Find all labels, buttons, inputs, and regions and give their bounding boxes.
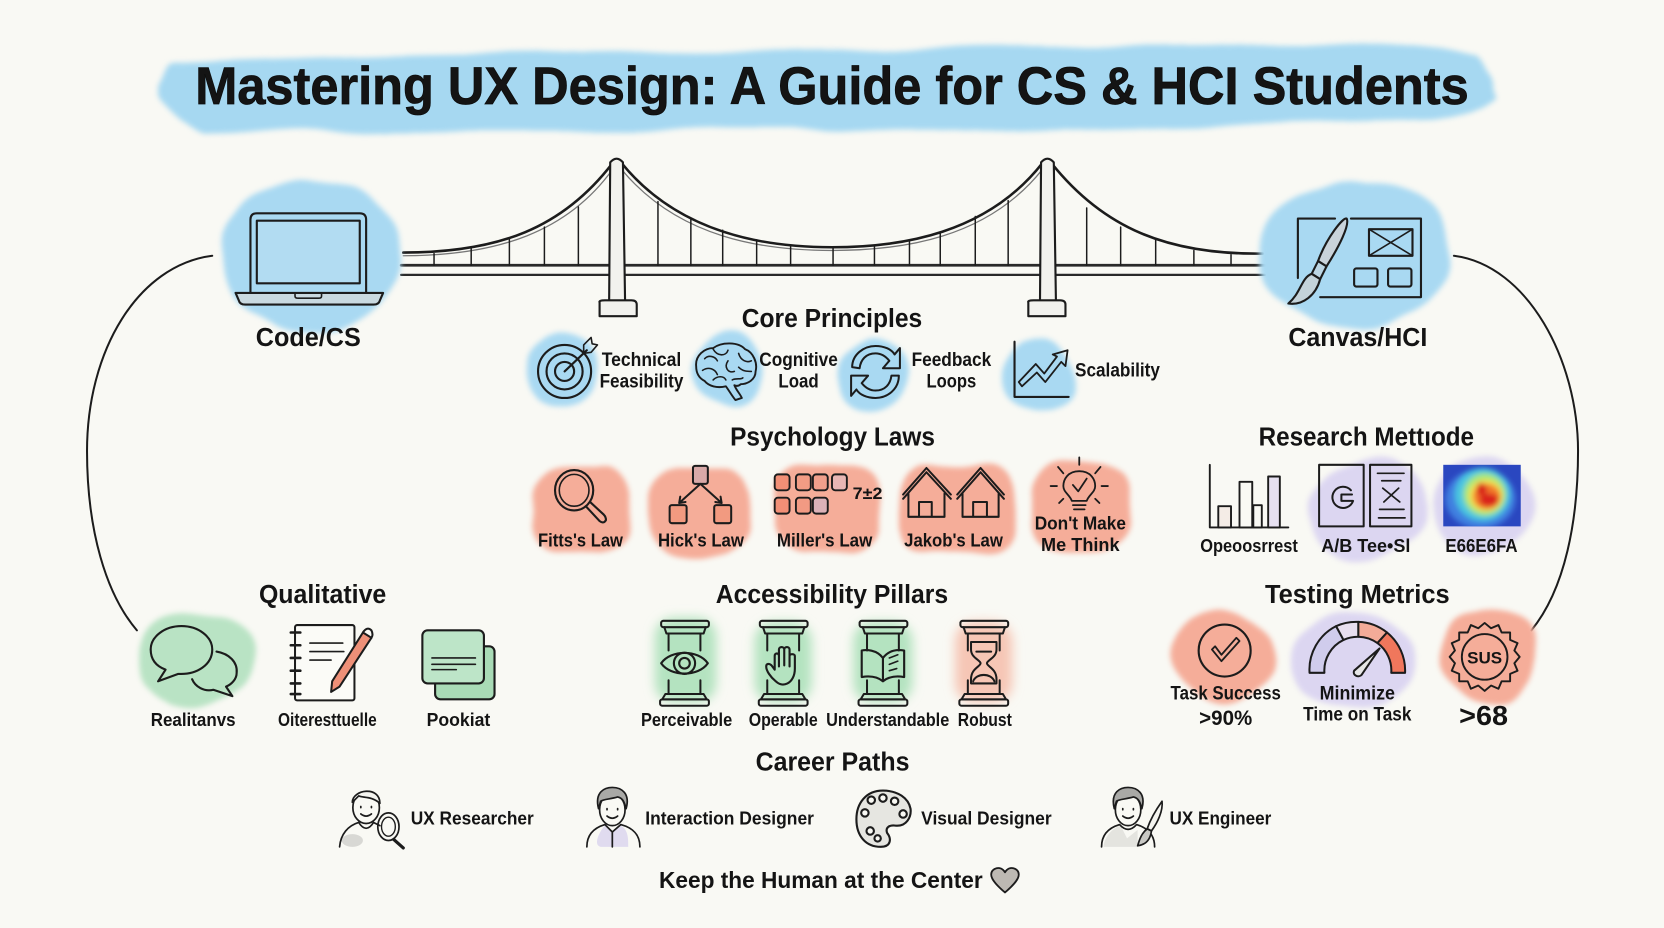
pillar: robust: Robust [958,710,1012,730]
career: visual designer [856,791,1052,847]
metric: task success [1171,609,1281,730]
section: research methods [1200,424,1532,559]
icon: canvas and brush [1288,218,1421,304]
pillar: robust [955,621,1012,730]
law: don't make me think: Don't Make [1035,514,1126,534]
message text: Keep the Human at the Center [659,867,983,893]
principle: feedback loops: Feedback [912,350,992,371]
law: don't make me think: Me Think [1041,535,1121,555]
right connecting arc [1454,256,1578,630]
career: interaction designer [587,787,814,847]
heading: Testing Metrics [1265,581,1450,609]
method: interviews [136,610,253,730]
section: testing metrics [1171,581,1536,731]
principle: technical feasibility [526,331,684,408]
career: ux researcher: UX Researcher [411,809,534,829]
law: don't make me think [1033,457,1130,555]
blue wash [1260,177,1451,328]
bridge towers [599,159,1065,316]
method: heatmap: E66E6FA [1445,536,1518,556]
metric: sus score [1440,607,1536,731]
heading: Core Principles [742,305,922,333]
law: miller [773,467,883,554]
pillar: operable [749,621,818,730]
label: Canvas/HCI [1288,324,1427,352]
section: career paths [340,748,1271,848]
pillar: operable: Operable [749,710,818,730]
principle: scalability [1004,337,1160,414]
metric: time on task gauge: Time on Task [1303,705,1412,726]
icon: heart [991,868,1019,892]
metric: sus score: >68 [1459,700,1508,731]
pillar: understandable [826,621,949,730]
career: visual designer: Visual Designer [921,809,1052,829]
law: fitts [532,465,630,554]
principle: technical feasibility: Feasibility [600,371,684,392]
heading: Accessibility Pillars [716,581,948,609]
law: hick: Hick's Law [658,531,745,551]
blue wash [219,178,399,333]
pillar: understandable: Understandable [826,710,949,730]
principle: scalability: Scalability [1075,361,1160,382]
canvas/hci node [1260,177,1451,352]
career: interaction designer: Interaction Designer [645,809,814,829]
metric: task success: >90% [1199,707,1252,730]
method: a/b test: A/B Tee•Sl [1321,536,1410,556]
law: jakob: Jakob's Law [904,531,1004,551]
section: psychology laws [532,424,1130,555]
method: notebook [278,625,377,730]
method: interviews: Realitanvs [151,710,236,730]
method: cards [422,630,495,730]
principle: cognitive load: Cognitive [759,350,838,371]
principle: feedback loops [838,334,992,409]
label: Code/CS [256,324,361,352]
pillar: perceivable: Perceivable [641,710,732,730]
bridge between code and canvas [401,159,1265,316]
law: jakob [900,465,1016,554]
icon: laptop [236,213,383,305]
metric: time on task gauge: Minimize [1320,683,1395,704]
career: ux engineer: UX Engineer [1169,809,1271,829]
method: a/b test [1310,460,1426,559]
principle: cognitive load [691,332,838,409]
heading: Research Mettıode [1259,424,1474,452]
section: qualitative [136,581,495,730]
heading: Psychology Laws [730,424,935,452]
principle: feedback loops: Loops [926,371,976,392]
metric: task success: Task Success [1171,683,1281,704]
principle: cognitive load: Load [778,371,819,392]
law: miller: 7±2 [853,484,882,503]
career: ux engineer [1102,787,1271,847]
title banner [161,45,1497,134]
code/cs node [219,178,399,352]
closing message [659,867,1019,893]
title text: Mastering UX Design: A Guide for CS & HCI Students [195,57,1469,116]
method: bar chart: Opeoosrrest [1200,536,1298,556]
title brush stroke [161,45,1497,134]
metric: sus score: SUS [1467,648,1502,667]
section: core principles [526,305,1160,414]
heading: Qualitative [259,581,386,609]
method: heatmap [1433,454,1532,556]
law: fitts: Fitts's Law [538,531,624,551]
pillar: perceivable [641,618,732,730]
section: accessibility pillars [641,581,1012,730]
method: bar chart [1200,465,1298,556]
method: notebook: Oiteresttuelle [278,710,377,730]
heading: Career Paths [756,748,909,776]
law: miller: Miller's Law [777,531,873,551]
metric: time on task gauge [1290,613,1414,726]
method: cards: Pookiat [427,710,490,730]
principle: technical feasibility: Technical [602,350,681,371]
left connecting arc [87,256,212,630]
career: ux researcher [340,791,534,848]
law: hick [651,466,752,554]
